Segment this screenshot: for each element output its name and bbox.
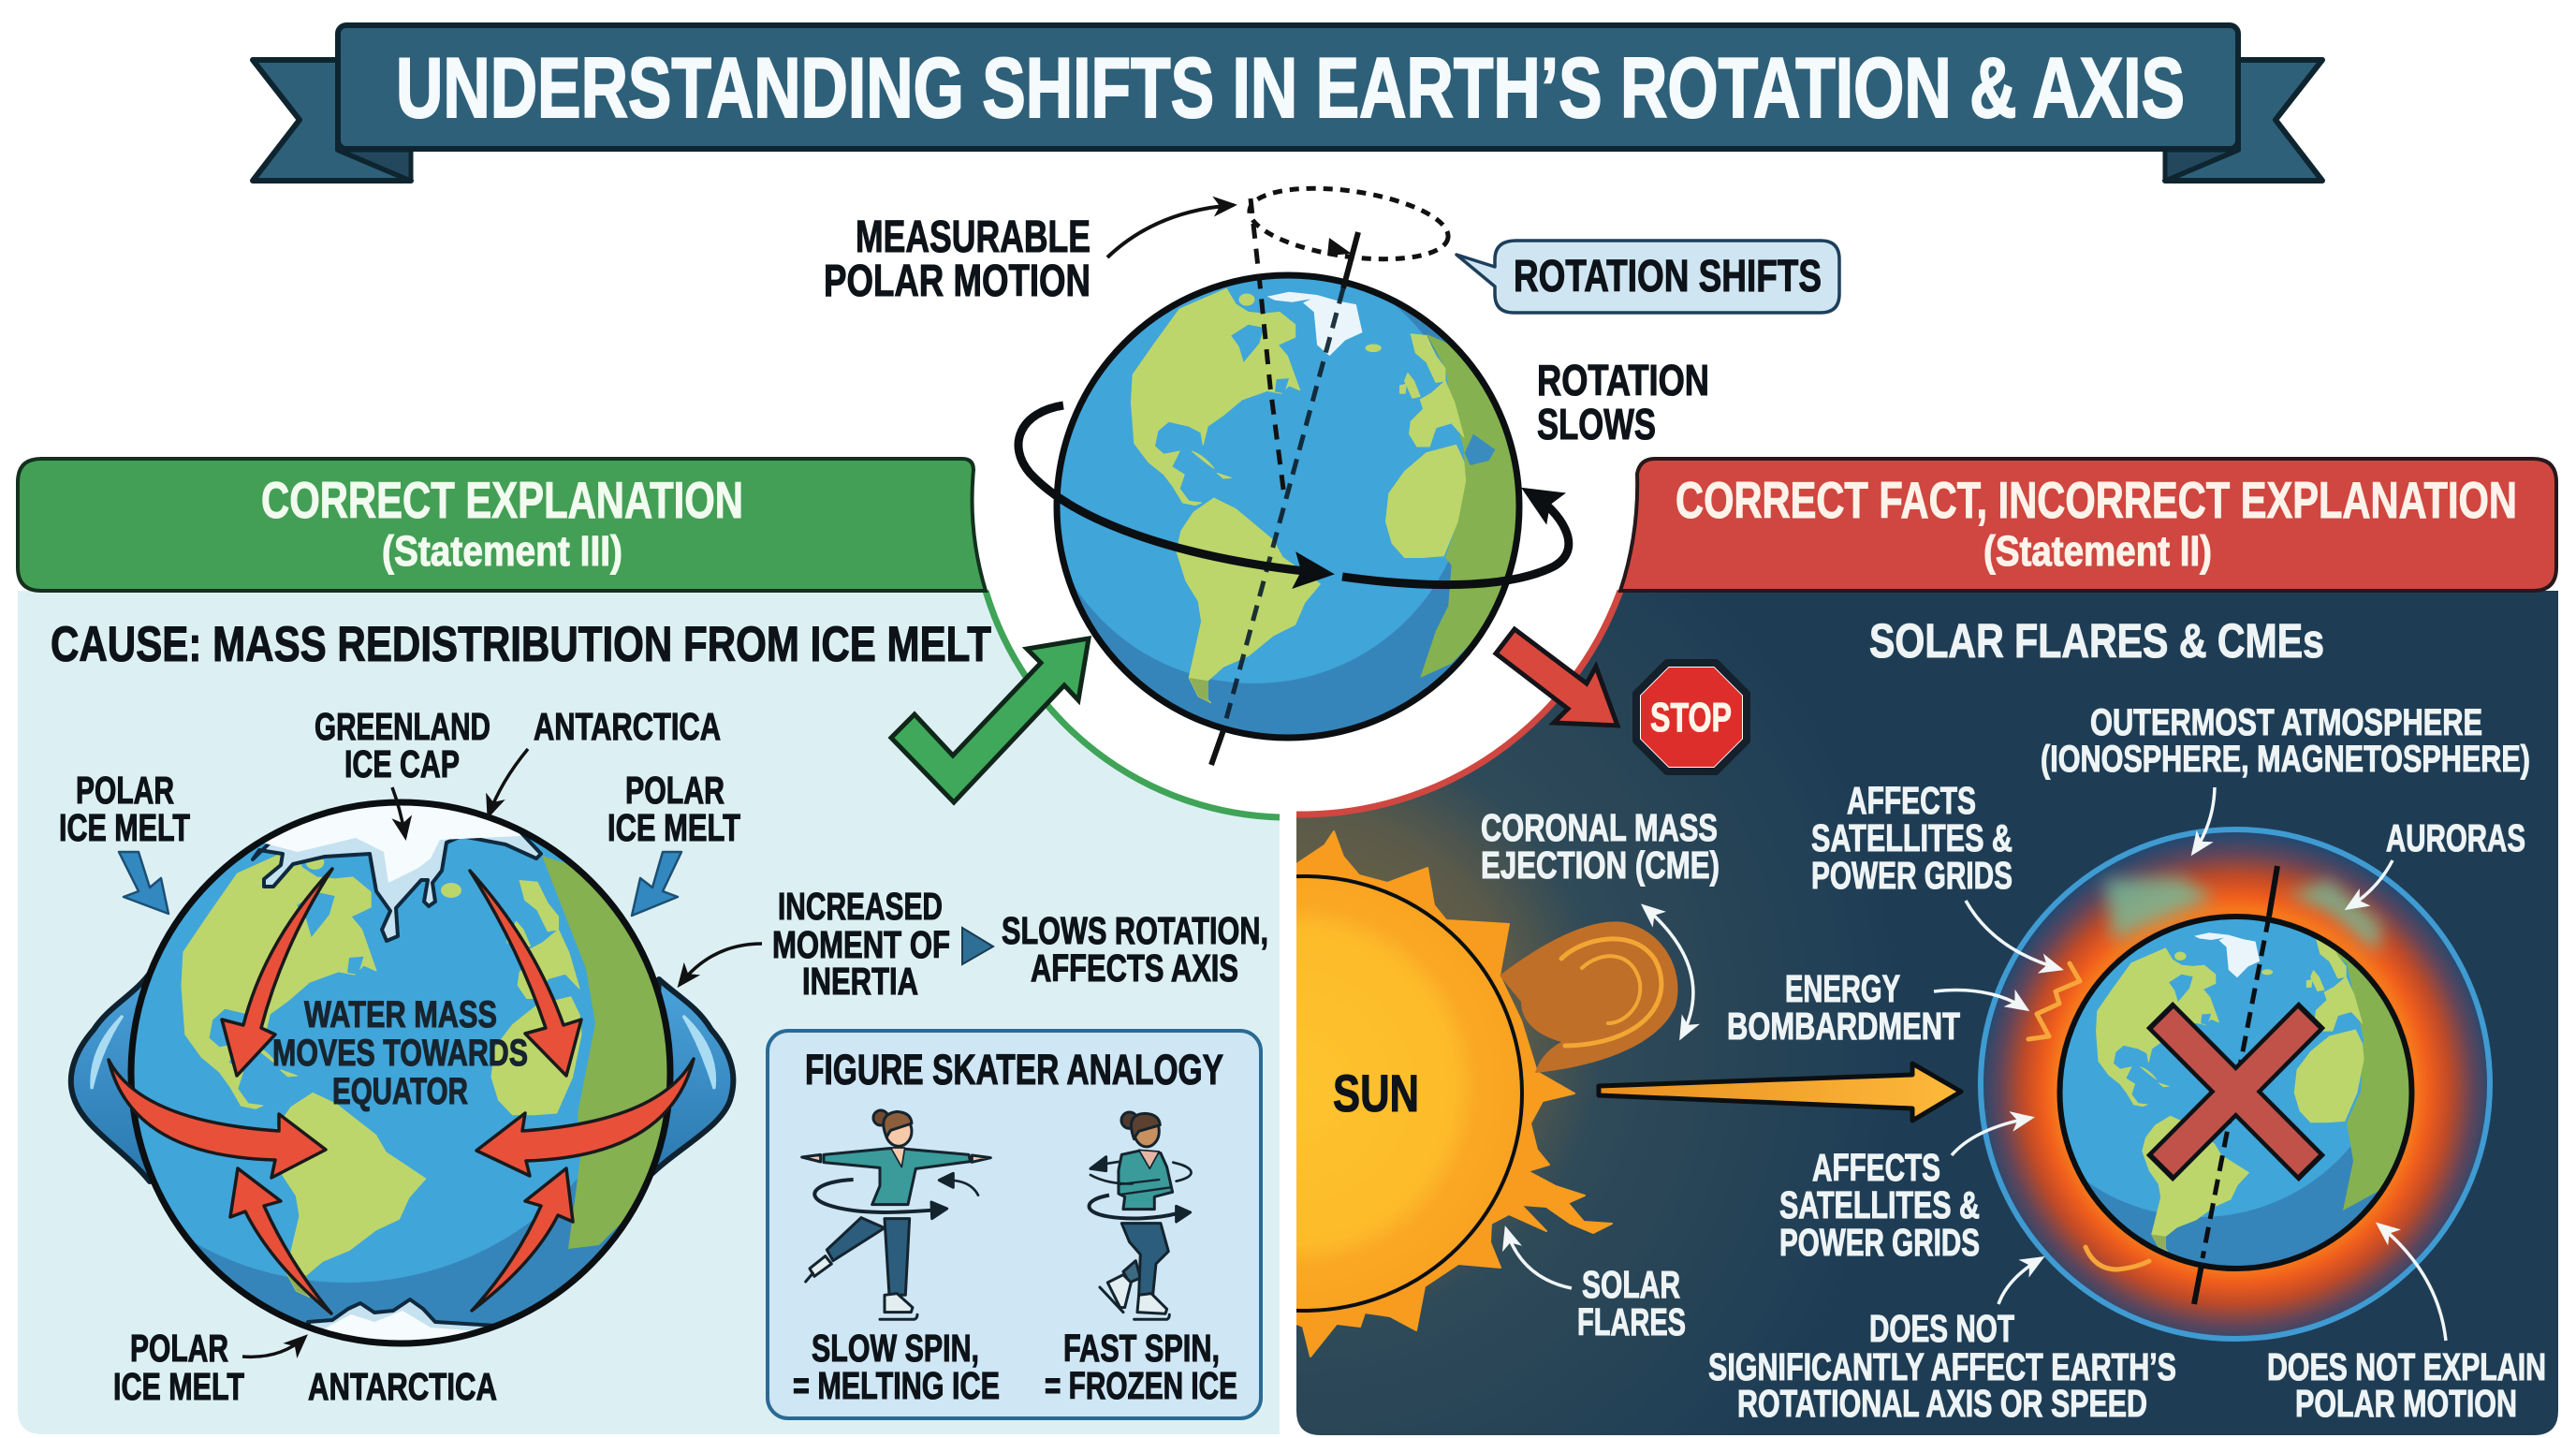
- label: affects satellites top: POWER GRIDS: [1811, 854, 2012, 897]
- label: sun: SUN: [1333, 1064, 1419, 1123]
- callout: rotation shifts: ROTATION SHIFTS: [1514, 252, 1822, 301]
- icon: stop sign: [1636, 663, 1747, 771]
- header subtitle: (Statement II): [1983, 527, 2212, 575]
- panel body: ice melt: [18, 591, 1280, 1434]
- solar flares heading: SOLAR FLARES & CMEs: [1869, 614, 2324, 668]
- label: polar ice melt right: POLAR: [625, 769, 724, 812]
- label: affects satellites bottom: [1779, 1146, 1980, 1264]
- label: affects satellites top: AFFECTS: [1847, 779, 1976, 822]
- arrowhead on ellipse: [1327, 238, 1352, 256]
- cause heading: CAUSE: MASS REDISTRIBUTION FROM ICE MELT: [51, 617, 991, 672]
- label: does not explain: [2267, 1345, 2546, 1425]
- header title: CORRECT EXPLANATION: [261, 471, 743, 529]
- globe: [2057, 914, 2415, 1271]
- label: outermost atmosphere: [2041, 702, 2530, 780]
- label: energy bombardment: ENERGY: [1785, 967, 1900, 1010]
- arrow: affects top: [1966, 901, 2060, 969]
- caption: fast spin: = FROZEN ICE: [1045, 1364, 1237, 1407]
- label: greenland ice cap: [315, 705, 490, 785]
- label: solar flares: SOLAR: [1582, 1263, 1680, 1306]
- header subtitle: (Statement III): [382, 527, 622, 575]
- arrow: blue right: [632, 852, 681, 916]
- label: polar ice melt right: ICE MELT: [607, 806, 740, 849]
- label: does not affect: SIGNIFICANTLY AFFECT EARTH’S: [1708, 1345, 2176, 1388]
- panel: correct explanation: [18, 459, 1280, 1434]
- label: auroras: AURORAS: [2386, 816, 2525, 859]
- label: greenland ice cap: GREENLAND: [315, 705, 490, 748]
- label: slows rotation: AFFECTS AXIS: [1031, 946, 1238, 990]
- icon: skater fast: [1090, 1112, 1192, 1319]
- original axis dashed: [1251, 198, 1284, 496]
- label: polar ice melt left: POLAR: [76, 769, 174, 812]
- text: water mass: EQUATOR: [332, 1071, 468, 1112]
- label: polar ice melt bottom: ICE MELT: [113, 1365, 244, 1408]
- callout: rotation shifts: [1456, 241, 1839, 313]
- label: greenland ice cap: ICE CAP: [344, 742, 460, 785]
- arrow: auroras: [2348, 860, 2393, 908]
- right earth with atmosphere: [1981, 824, 2490, 1339]
- arrow: affects bottom: [1952, 1118, 2031, 1155]
- label: slows rotation: [1002, 909, 1268, 990]
- label: polar ice melt left: [59, 769, 190, 849]
- label: affects satellites bottom: SATELLITES &: [1779, 1183, 1980, 1226]
- caption: slow spin: = MELTING ICE: [793, 1364, 1000, 1407]
- dark panel body: [1296, 591, 2558, 1435]
- red arrow upper left: [222, 869, 332, 1076]
- label: rotation slows: ROTATION: [1537, 356, 1709, 404]
- left globe: [127, 800, 674, 1346]
- arrow: energy: [1934, 990, 2027, 1009]
- heading: FIGURE SKATER ANALOGY: [805, 1046, 1223, 1093]
- label: measurable polar motion: MEASURABLE: [856, 213, 1090, 262]
- equatorial bulge right: [648, 979, 733, 1178]
- rotation arrow left: [1018, 405, 1322, 573]
- label: increased moment of inertia: [772, 885, 950, 1003]
- label: rotation slows: [1537, 356, 1709, 448]
- label: increased moment of inertia: INERTIA: [802, 960, 918, 1003]
- label: measurable polar motion: [824, 213, 1090, 306]
- label: does not affect: DOES NOT: [1869, 1307, 2014, 1350]
- tilted axis solid top: [1343, 232, 1358, 288]
- rotation arrow right: [1342, 494, 1569, 585]
- caption: slow spin: SLOW SPIN,: [812, 1327, 979, 1370]
- title banner: [253, 25, 2322, 181]
- icon: skater slow: [802, 1110, 990, 1319]
- caption: fast spin: FAST SPIN,: [1063, 1327, 1220, 1370]
- banner right tail: [2165, 60, 2322, 181]
- text: water mass: MOVES TOWARDS: [272, 1033, 528, 1074]
- green arc border: [986, 591, 1280, 817]
- red arrow lower left: [230, 1168, 331, 1313]
- label: affects satellites top: SATELLITES &: [1811, 816, 2012, 859]
- label: energy bombardment: BOMBARDMENT: [1727, 1005, 1960, 1048]
- aurora left: [2104, 877, 2215, 943]
- banner left tail: [253, 60, 411, 181]
- panel: figure skater analogy: [768, 1031, 1261, 1418]
- tilted axis dashed: [1226, 288, 1343, 719]
- sparks: [2028, 963, 2149, 1269]
- axis: [2194, 866, 2277, 1304]
- icon: green check arrow: [891, 638, 1089, 802]
- label: rotation slows: SLOWS: [1537, 400, 1656, 448]
- label: affects satellites bottom: POWER GRIDS: [1779, 1221, 1980, 1264]
- red arrow middle left: [109, 1060, 326, 1178]
- label: energy bombardment: [1727, 967, 1960, 1048]
- banner fold shadows: [338, 150, 2238, 181]
- arrow: polar motion to ellipse: [1107, 205, 1234, 257]
- label: polar ice melt left: ICE MELT: [59, 806, 190, 849]
- arrow: inertia to bulge: [680, 944, 762, 985]
- label: polar ice melt bottom: [113, 1327, 244, 1408]
- label: increased moment of inertia: INCREASED: [778, 885, 943, 928]
- arrow: cme double: [1644, 906, 1693, 1037]
- sun with corona: [1296, 830, 1613, 1357]
- central earth with axis and rotation: [1018, 177, 1569, 765]
- globe: [1054, 271, 1522, 741]
- icon: red x: [2159, 1015, 2312, 1168]
- icon: stop sign: STOP: [1650, 695, 1732, 741]
- arrow: blue left: [119, 852, 168, 914]
- label: antarctica top: ANTARCTICA: [534, 705, 721, 748]
- label: solar flares: [1577, 1263, 1686, 1343]
- icon: triangle: [962, 928, 993, 964]
- dashed polar motion ellipse: [1245, 177, 1453, 271]
- banner main ribbon: [338, 25, 2238, 149]
- aurora right: [2288, 880, 2381, 953]
- equatorial bulge left: [71, 964, 155, 1181]
- left earth with bulge: [67, 800, 736, 1346]
- bulge highlights: [92, 1016, 715, 1089]
- ice cap bottom: [306, 1298, 493, 1341]
- label: coronal mass ejection: CORONAL MASS: [1481, 806, 1718, 849]
- text: water mass: [272, 994, 528, 1112]
- text: water mass: WATER MASS: [304, 994, 497, 1035]
- red header: [1620, 459, 2556, 591]
- label: coronal mass ejection: EJECTION (CME): [1481, 844, 1720, 887]
- arrow: does not explain: [2378, 1225, 2446, 1341]
- arrow: red to stop: [1496, 629, 1617, 726]
- sun disc: [1296, 874, 1524, 1313]
- caption: slow spin: [793, 1327, 1000, 1407]
- label: does not affect: [1708, 1307, 2176, 1425]
- arrow: antarctica: [489, 749, 528, 815]
- label: polar ice melt bottom: POLAR: [130, 1327, 228, 1370]
- atmosphere halo: [1981, 829, 2490, 1339]
- label: measurable polar motion: POLAR MOTION: [824, 257, 1090, 306]
- arrow: outermost: [2193, 787, 2215, 853]
- label: does not affect: ROTATIONAL AXIS OR SPEED: [1737, 1382, 2147, 1425]
- icon: coronal mass ejection: [1500, 921, 1678, 1073]
- label: antarctica bottom: ANTARCTICA: [308, 1365, 497, 1408]
- label: solar flares: FLARES: [1577, 1300, 1686, 1343]
- red arrow lower right: [472, 1168, 573, 1311]
- label: affects satellites top: [1811, 779, 2012, 897]
- label: affects satellites bottom: AFFECTS: [1812, 1146, 1940, 1189]
- red arrow upper right: [470, 871, 581, 1076]
- red arrow middle right: [476, 1059, 694, 1176]
- arrow: solar flares: [1506, 1229, 1572, 1288]
- arrow: bottom polar: [242, 1337, 305, 1357]
- label: increased moment of inertia: MOMENT OF: [772, 923, 950, 966]
- corona: [1296, 831, 1612, 1357]
- caption: fast spin: [1045, 1327, 1237, 1407]
- arrow: does not affect: [1998, 1258, 2042, 1304]
- arrow: sun energy beam: [1599, 1064, 1961, 1121]
- tilted axis solid bottom: [1211, 730, 1223, 765]
- arrow: greenland: [392, 787, 405, 837]
- green header: [18, 459, 986, 591]
- label: slows rotation: SLOWS ROTATION,: [1002, 909, 1268, 952]
- panel: correct fact incorrect explanation: [1296, 459, 2558, 1435]
- label: polar ice melt right: [607, 769, 740, 849]
- red arc border: [1296, 591, 1620, 814]
- globe outline: [131, 802, 670, 1343]
- label: coronal mass ejection: [1481, 806, 1720, 887]
- ice cap top: [253, 796, 541, 941]
